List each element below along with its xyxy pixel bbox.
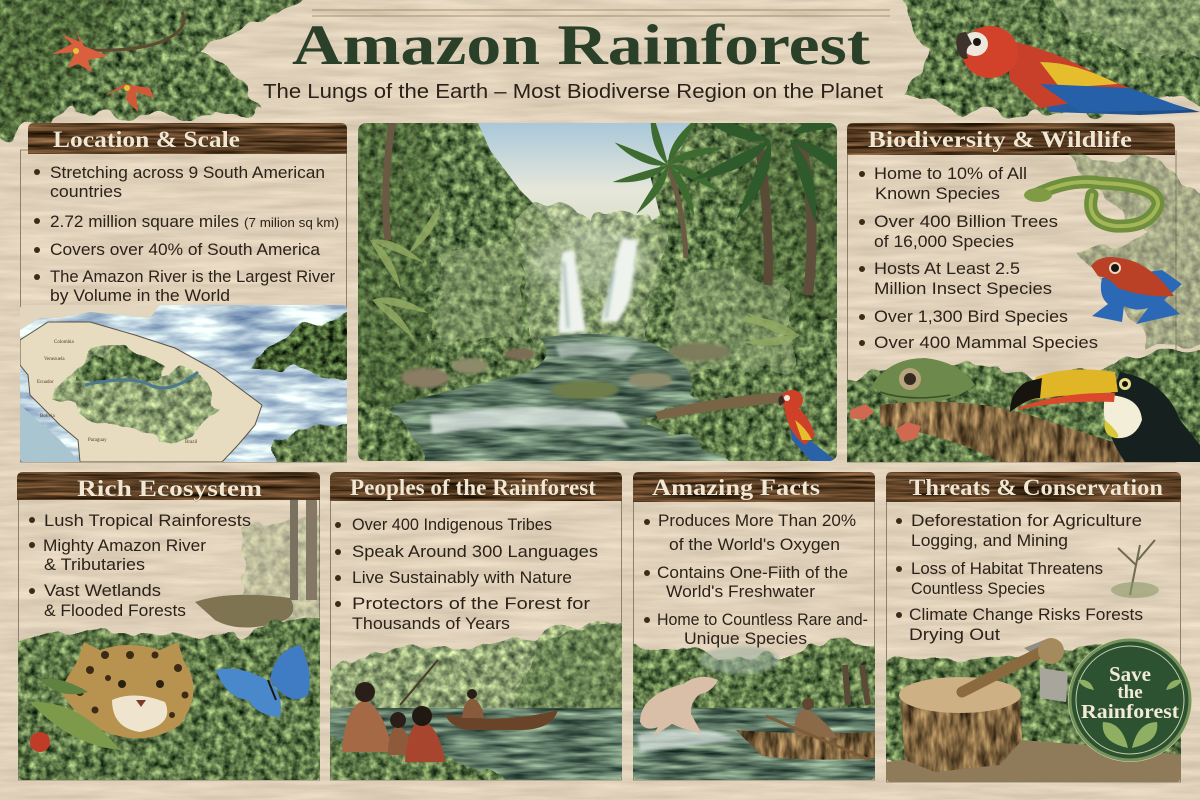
icon: axe xyxy=(962,638,1068,702)
icon: parrot on branch xyxy=(778,390,838,462)
icon: pink river dolphin xyxy=(640,677,718,737)
river xyxy=(390,334,730,461)
indigenous family on the bank xyxy=(342,660,445,762)
bullet list: Live Sustainably with Nature xyxy=(352,568,572,587)
heading bar: Amazing Facts xyxy=(652,475,820,500)
foliage: top left corner xyxy=(0,0,325,140)
icon: canoe with paddler xyxy=(445,689,558,730)
map of the Amazon basin: Paraguay xyxy=(88,438,107,443)
bullet list: Stretching across 9 South American xyxy=(50,163,325,182)
palms xyxy=(845,665,868,705)
bullet list: Over 400 Billion Trees xyxy=(874,212,1058,231)
panel: peoples of the rainforest xyxy=(310,472,640,800)
icon: jaguar xyxy=(60,642,194,738)
bullet list: World's Freshwater xyxy=(666,582,815,601)
icon: toucan xyxy=(1010,369,1200,462)
fern fronds xyxy=(368,204,801,351)
heading bar xyxy=(633,472,875,502)
map of the Amazon basin: Colombia xyxy=(54,340,75,345)
bullet list: (7 milion sq km) xyxy=(244,215,339,230)
heading bar: Peoples of the Rainforest xyxy=(350,475,596,500)
vine branch xyxy=(85,12,184,50)
red jungle flowers xyxy=(850,404,921,442)
icon: red flower xyxy=(30,732,50,752)
small dead tree xyxy=(1118,540,1155,595)
icon: green tree frog head xyxy=(872,358,975,402)
bullet list: Produces More Than 20% xyxy=(658,511,856,530)
title rule lines xyxy=(312,10,890,16)
bullet list: & Tributaries xyxy=(44,555,145,574)
badge: save the rainforest: Save xyxy=(1109,662,1151,686)
bullet list: Protectors of the Forest for xyxy=(352,594,590,613)
bullet list xyxy=(34,163,339,305)
bullet list: Mighty Amazon River xyxy=(43,536,206,555)
panel: amazing facts xyxy=(633,472,875,780)
bullet list: Logging, and Mining xyxy=(911,531,1068,550)
bullet list: Vast Wetlands xyxy=(44,581,161,600)
rocks xyxy=(401,343,730,399)
sky xyxy=(478,123,690,245)
bullet list: Over 1,300 Bird Species xyxy=(874,307,1068,326)
fallen log and riverbank xyxy=(640,407,837,461)
mossy rock ledge xyxy=(195,595,293,628)
panel: threats and conservation xyxy=(866,472,1200,782)
icon: blue morpho butterfly xyxy=(216,645,310,717)
bullet list: Contains One-Fiith of the xyxy=(657,563,848,582)
bullet list: Unique Species xyxy=(684,629,807,648)
bullet list: Over 400 Indigenous Tribes xyxy=(352,515,552,534)
icon: red and blue poison frog xyxy=(1091,257,1182,324)
forest backdrop xyxy=(633,637,875,708)
tall jungle trees xyxy=(693,123,837,296)
river xyxy=(633,708,875,780)
dirt ground xyxy=(886,740,1181,782)
bullet list: & Flooded Forests xyxy=(44,601,186,620)
bullet list: of 16,000 Species xyxy=(874,232,1014,251)
badge: save the rainforest xyxy=(1068,638,1192,762)
bullet list: Climate Change Risks Forests xyxy=(909,605,1143,624)
river bank xyxy=(330,737,506,780)
bullet list xyxy=(896,511,1143,644)
panel: location and scale xyxy=(20,123,365,480)
heading bar xyxy=(17,472,320,501)
bullet list xyxy=(29,511,251,620)
bullet list: Lush Tropical Rainforests xyxy=(44,511,251,530)
waterfall xyxy=(558,238,638,334)
map of the Amazon basin: Brazil xyxy=(185,440,198,445)
foliage behind animals xyxy=(1065,156,1200,345)
bullet list: Deforestation for Agriculture xyxy=(911,511,1142,530)
icon: scarlet macaw xyxy=(956,26,1200,115)
icon: orange flower xyxy=(52,30,108,72)
bullet list: of the World's Oxygen xyxy=(669,535,840,554)
left foreground bank xyxy=(358,399,425,461)
mossy branch xyxy=(880,402,1180,462)
icon: wooden boat with rower xyxy=(736,698,875,760)
bullet list: countries xyxy=(50,182,122,201)
icon: tree stump xyxy=(899,677,1022,772)
map of the Amazon basin: Venezuela xyxy=(44,357,65,362)
bullet list: Drying Out xyxy=(909,625,1000,644)
bullet list: Hosts At Least 2.5 xyxy=(874,259,1020,278)
bullet list: Speak Around 300 Languages xyxy=(352,542,598,561)
heading bar xyxy=(847,123,1175,155)
badge: save the rainforest: Rainforest xyxy=(1081,701,1179,723)
bullet list: Over 400 Mammal Species xyxy=(874,333,1098,352)
bullet list xyxy=(335,515,598,633)
panel: biodiversity and wildlife xyxy=(835,123,1200,480)
bullet list: 2.72 million square miles xyxy=(50,212,239,231)
bullet list: Million Insect Species xyxy=(874,279,1052,298)
panel: rich ecosystem xyxy=(17,472,320,780)
heading bar: Rich Ecosystem xyxy=(77,476,262,501)
river bank trees xyxy=(251,312,347,380)
bullet list: Thousands of Years xyxy=(352,614,510,633)
bullet list: Loss of Habitat Threatens xyxy=(911,559,1103,578)
map of the Amazon basin: Ecuador xyxy=(37,380,54,385)
icon: green snake xyxy=(1024,182,1158,226)
jungle floor foliage xyxy=(18,618,320,780)
heading bar: Biodiversity & Wildlife xyxy=(868,127,1132,152)
foliage: top right corner xyxy=(885,0,1200,114)
central forest waterfall scene xyxy=(320,90,880,490)
green bushes xyxy=(866,650,1200,760)
bullet list xyxy=(644,511,868,648)
misty distant forest xyxy=(515,206,665,340)
river xyxy=(330,708,622,780)
bullet list: Covers over 40% of South America xyxy=(50,240,321,259)
big jungle leaves xyxy=(30,679,120,750)
heading bar xyxy=(886,472,1181,502)
subtitle: The Lungs of the Earth – Most Biodiverse Region on the Planet xyxy=(263,81,883,103)
misty trees xyxy=(240,515,320,622)
bullet list: Home to 10% of All xyxy=(874,164,1027,183)
bullet list: by Volume in the World xyxy=(50,286,230,305)
heading bar: Threats & Conservation xyxy=(909,475,1163,500)
bullet list: The Amazon River is the Largest River xyxy=(50,267,335,286)
title: Amazon Rainforest xyxy=(292,14,870,77)
heading bar: Location & Scale xyxy=(53,127,240,152)
map of the Amazon basin: Bolivia xyxy=(40,414,56,419)
heading bar xyxy=(28,123,347,154)
map of the Amazon basin xyxy=(20,305,347,462)
bullet list: Home to Countless Rare and- xyxy=(657,610,868,629)
badge: save the rainforest: the xyxy=(1117,682,1143,703)
forest backdrop xyxy=(330,620,622,708)
left tree trunk xyxy=(386,123,392,240)
bullet list xyxy=(859,164,1098,352)
bullet list: Known Species xyxy=(875,184,1000,203)
icon: orange flower lower xyxy=(104,84,154,112)
bullet list: Countless Species xyxy=(911,579,1045,598)
badge leaves xyxy=(1078,680,1182,748)
palm tree xyxy=(612,109,724,258)
